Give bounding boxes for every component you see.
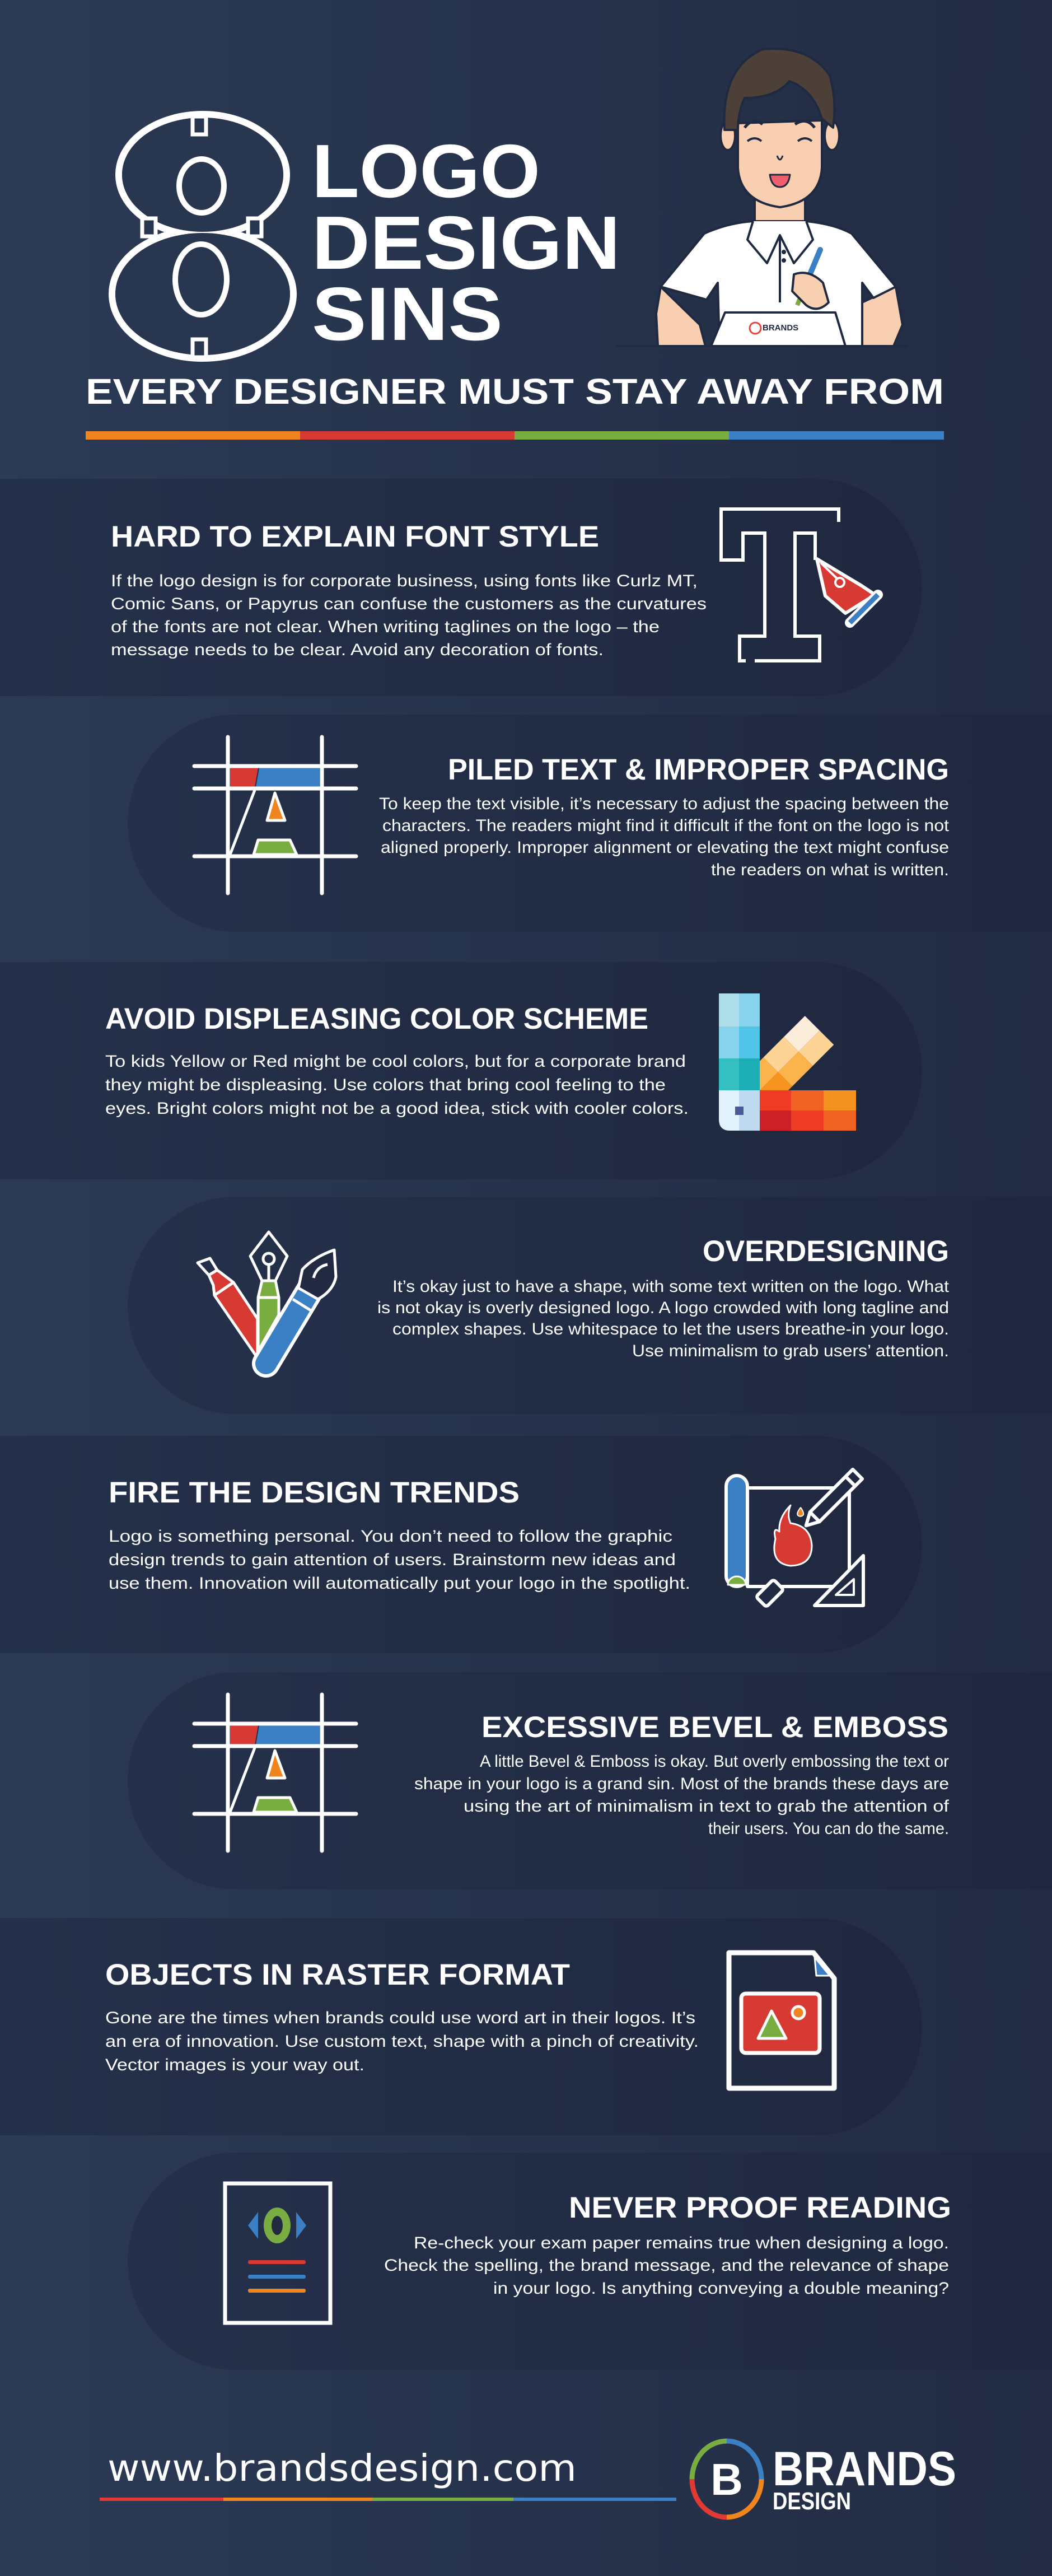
footer: brands design logo: DESIGN [773, 2488, 851, 2515]
heading: OVERDESIGNING [703, 1235, 949, 1268]
title: LOGO DESIGN SINS [312, 129, 620, 356]
text block: their users. You can do the same. [708, 1819, 949, 1838]
text block: use them. Innovation will automatically put your logo in the spotlight. [109, 1574, 690, 1593]
text block: characters. The readers might find it difficult if the font on the logo is not [382, 816, 950, 835]
text block [105, 2009, 699, 2074]
text block [105, 1052, 689, 1118]
icon: letter T with pen nib [721, 509, 878, 661]
text block: A little Bevel & Emboss is okay. But overly embossing the text or [480, 1752, 949, 1771]
icon: color swatch [719, 993, 856, 1131]
icon: document with eye [225, 2183, 330, 2323]
icon: marker, pen and brush [198, 1232, 336, 1364]
panel: overdesigning [128, 1197, 1052, 1414]
heading: FIRE THE DESIGN TRENDS [109, 1476, 520, 1509]
subtitle: EVERY DESIGNER MUST STAY AWAY FROM [86, 371, 944, 412]
header: big number 8 [112, 114, 293, 358]
text block: using the art of minimalism in text to grab the attention of [464, 1797, 950, 1816]
heading: OBJECTS IN RASTER FORMAT [105, 1958, 570, 1991]
text block: Gone are the times when brands could use word art in their logos. It’s [105, 2009, 695, 2027]
laptop logo text: BRANDS [763, 323, 798, 333]
text block [414, 1752, 950, 1838]
title: LOGO DESIGN SINS: DESIGN [312, 200, 620, 285]
text block: they might be displeasing. Use colors that bring cool feeling to the [105, 1076, 666, 1094]
text block: Logo is something personal. You don’t need to follow the graphic [109, 1527, 672, 1546]
panel: objects in raster format [0, 1918, 922, 2135]
title: LOGO DESIGN SINS: SINS [312, 272, 503, 356]
footer: brands design logo: BRANDS [773, 2442, 956, 2496]
text block: an era of innovation. Use custom text, shape with a pinch of creativity. [105, 2032, 699, 2051]
text block [384, 2234, 949, 2298]
text block: Re-check your exam paper remains true when designing a logo. [414, 2234, 949, 2252]
text block [379, 795, 950, 879]
panel: avoid displeasing color scheme [0, 962, 922, 1179]
icon: raster image document [729, 1953, 834, 2088]
footer: color line [100, 2498, 676, 2501]
heading: PILED TEXT & IMPROPER SPACING [448, 753, 949, 786]
illustration: designer character [616, 49, 907, 346]
color bar [86, 431, 944, 440]
text block: aligned properly. Improper alignment or elevating the text might confuse [381, 838, 949, 857]
heading: HARD TO EXPLAIN FONT STYLE [111, 520, 599, 553]
text block: Comic Sans, or Papyrus can confuse the customers as the curvatures [111, 595, 707, 613]
footer: brands design logo: B [710, 2454, 743, 2504]
text block: eyes. Bright colors might not be a good idea, stick with cooler colors. [105, 1099, 689, 1118]
panel: piled text & improper spacing [128, 715, 1052, 932]
panel: excessive bevel & emboss [128, 1672, 1052, 1889]
text block [109, 1527, 690, 1593]
text block: the readers on what is written. [711, 861, 949, 879]
text block: To keep the text visible, it’s necessary to adjust the spacing between the [379, 795, 949, 813]
icon: grid letter A [194, 1695, 356, 1851]
heading: NEVER PROOF READING [569, 2191, 951, 2224]
panel: never proof reading [128, 2153, 1052, 2370]
panel: hard to explain font style [0, 479, 922, 696]
text block: complex shapes. Use whitespace to let the users breathe-in your logo. [392, 1320, 949, 1338]
text block: of the fonts are not clear. When writing taglines on the logo – the [111, 618, 660, 636]
text block: message needs to be clear. Avoid any decoration of fonts. [111, 641, 604, 659]
panel: fire the design trends [0, 1436, 922, 1653]
text block [111, 572, 707, 659]
text block: Vector images is your way out. [105, 2056, 364, 2074]
text block: Use minimalism to grab users’ attention. [632, 1342, 949, 1360]
text block: To kids Yellow or Red might be cool colors, but for a corporate brand [105, 1052, 686, 1071]
title: LOGO DESIGN SINS: LOGO [312, 129, 540, 213]
text block: design trends to gain attention of users. Brainstorm new ideas and [109, 1551, 676, 1569]
icon: grid letter A [194, 737, 356, 893]
footer: brands design logo [692, 2441, 956, 2517]
footer: website url: www.brandsdesign.com [107, 2447, 577, 2490]
text block: in your logo. Is anything conveying a double meaning? [493, 2279, 949, 2298]
text block [377, 1277, 950, 1360]
icon: blueprint with flame [726, 1469, 863, 1607]
heading: AVOID DISPLEASING COLOR SCHEME [105, 1002, 648, 1035]
text block: If the logo design is for corporate business, using fonts like Curlz MT, [111, 572, 698, 590]
text block: It’s okay just to have a shape, with some text written on the logo. What [392, 1277, 950, 1296]
text block: Check the spelling, the brand message, and the relevance of shape [384, 2256, 949, 2275]
text block: shape in your logo is a grand sin. Most of the brands these days are [414, 1775, 949, 1793]
text block: is not okay is overly designed logo. A logo crowded with long tagline and [377, 1299, 949, 1317]
heading: EXCESSIVE BEVEL & EMBOSS [481, 1711, 948, 1744]
